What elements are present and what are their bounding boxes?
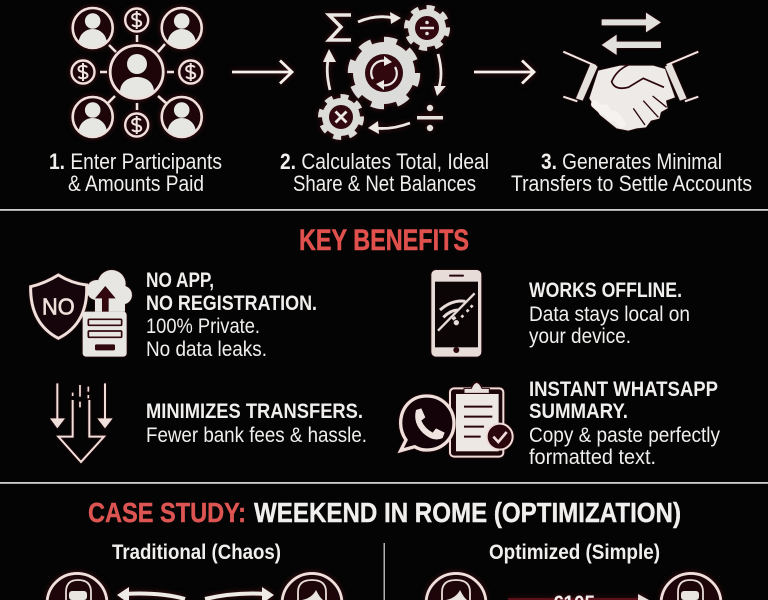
diagram: traditional chaos xyxy=(47,573,342,600)
subheading: optimized: Optimized (Simple) xyxy=(489,541,660,564)
icon: whatsapp summary clipboard xyxy=(401,382,513,457)
icon: participants network xyxy=(72,8,202,145)
gear: multiply xyxy=(320,96,362,138)
benefit text: works offline: your device. xyxy=(529,325,631,348)
arrow: step 2 to step 3 xyxy=(474,60,534,84)
step 2 caption: Share & Net Balances xyxy=(293,171,476,196)
gear: central cycle xyxy=(351,40,417,106)
step 3 caption xyxy=(511,149,752,196)
icon: offline phone xyxy=(431,270,481,357)
benefit text: minimizes transfers xyxy=(146,400,367,447)
step 1 caption xyxy=(49,149,222,196)
step 2 caption: 2. Calculates Total, Ideal xyxy=(280,149,489,174)
benefit text: no app: NO REGISTRATION. xyxy=(146,292,317,315)
icon: minimized transfer arrows xyxy=(50,383,113,462)
gear: divide xyxy=(406,8,448,48)
step 1 caption: 1. Enter Participants xyxy=(49,149,222,174)
benefit text: no app: No data leaks. xyxy=(146,338,267,361)
icon: calculation gears xyxy=(320,8,448,138)
benefit text: whatsapp summary xyxy=(529,378,720,469)
icon: no app shield and cloud form xyxy=(31,270,132,357)
benefit text: no app: 100% Private. xyxy=(146,315,260,338)
benefit text: minimizes transfers: Fewer bank fees & hassle. xyxy=(146,424,367,447)
heading: key benefits: KEY BENEFITS xyxy=(299,224,469,257)
icon: divide sign xyxy=(417,105,443,131)
benefit text: no app xyxy=(146,269,317,361)
step 3 caption: 3. Generates Minimal xyxy=(541,149,722,174)
heading: case study xyxy=(88,497,681,528)
diagram: optimized simple xyxy=(426,573,721,600)
icon: no app shield and cloud form: NO xyxy=(42,293,75,319)
step 2 caption xyxy=(280,149,489,196)
benefit text: works offline: WORKS OFFLINE. xyxy=(529,279,682,302)
icon: handshake with transfer arrows xyxy=(563,13,698,131)
arrow: step 1 to step 2 xyxy=(232,60,292,84)
icon: sigma xyxy=(329,15,351,40)
benefit text: whatsapp summary: Copy & paste perfectly xyxy=(529,424,720,447)
subheading: traditional: Traditional (Chaos) xyxy=(112,541,281,564)
benefit text: minimizes transfers: MINIMIZES TRANSFERS. xyxy=(146,400,363,423)
benefit text: whatsapp summary: formatted text. xyxy=(529,446,656,469)
step 1 caption: & Amounts Paid xyxy=(68,171,204,196)
benefit text: works offline: Data stays local on xyxy=(529,303,690,326)
benefit text: whatsapp summary: INSTANT WHATSAPP xyxy=(529,378,718,401)
benefit text: no app: NO APP, xyxy=(146,269,214,292)
heading: case study: WEEKEND IN ROME (OPTIMIZATION) xyxy=(254,497,681,528)
benefit text: works offline xyxy=(529,279,690,348)
benefit text: whatsapp summary: SUMMARY. xyxy=(529,400,628,423)
heading: case study: CASE STUDY: xyxy=(88,497,246,528)
